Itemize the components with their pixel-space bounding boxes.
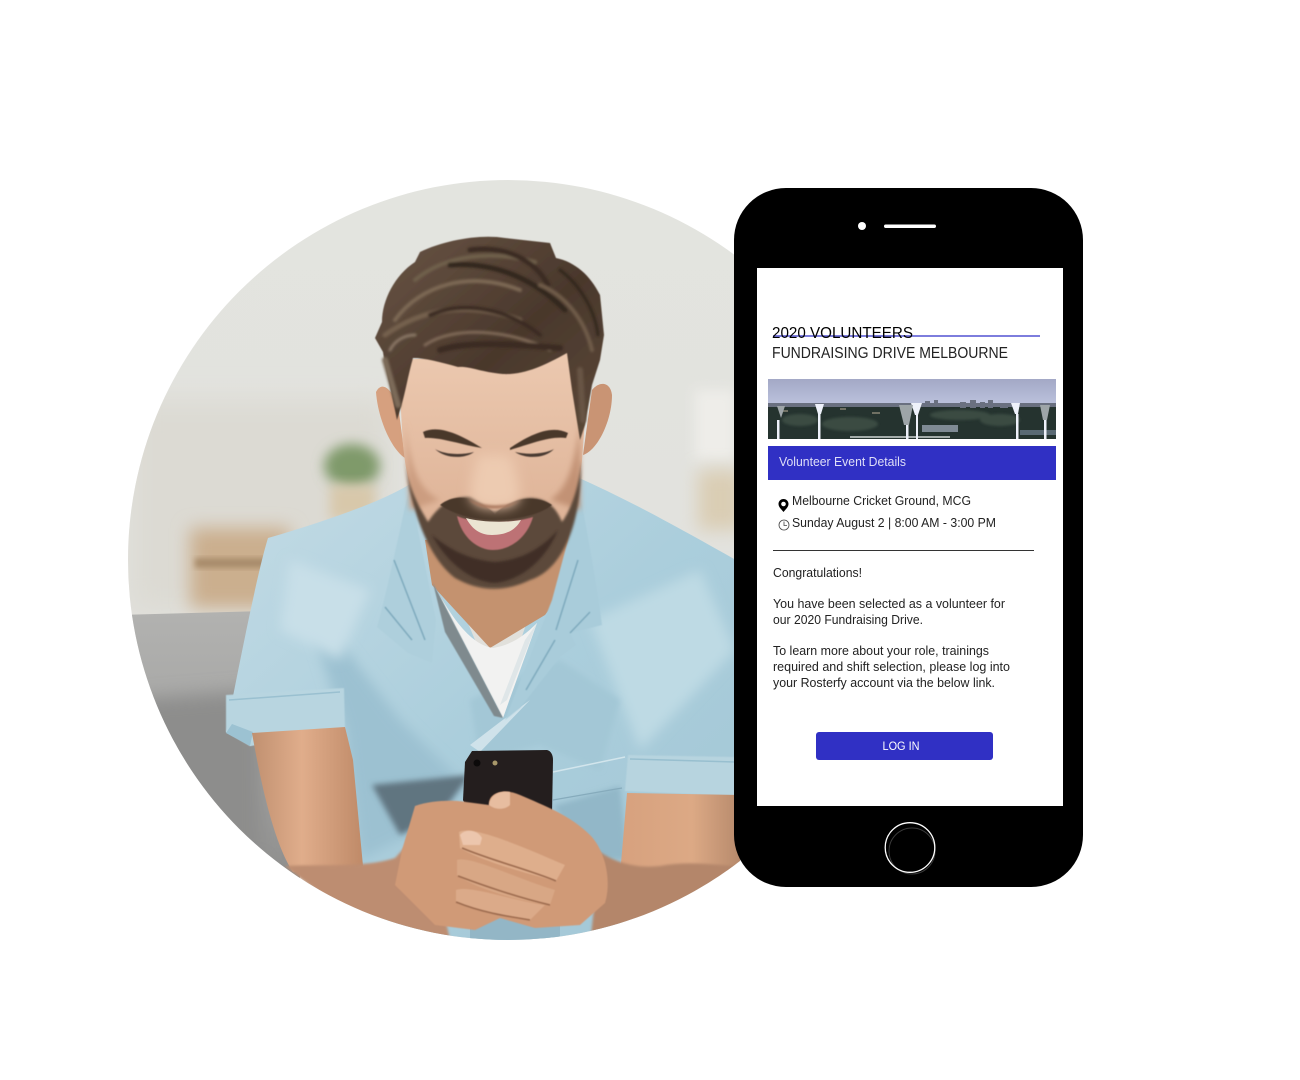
event location: Melbourne Cricket Ground, MCG (792, 494, 971, 508)
right arm (620, 793, 740, 875)
left sleeve cuff (226, 688, 345, 746)
email title (772, 325, 1040, 362)
email body text: To learn more about your role, trainings (773, 644, 989, 658)
phone mockup (734, 188, 1083, 887)
denim shirt body (226, 477, 745, 950)
hair mass (375, 237, 604, 440)
skyline (768, 400, 1056, 408)
lower placket (470, 700, 530, 752)
icon: clock (779, 520, 789, 530)
phone screen (757, 268, 1063, 806)
infographic canvas (128, 180, 1083, 940)
email title: 2020 VOLUNTEERS (772, 325, 913, 342)
email body text: our 2020 Fundraising Drive. (773, 613, 923, 627)
email body text: Congratulations! (773, 566, 862, 580)
tree line (782, 410, 1020, 431)
fabric shading (319, 650, 463, 854)
event date and time: Sunday August 2 | 8:00 AM - 3:00 PM (792, 516, 996, 530)
photo: man smiling at his phone in a circle (128, 180, 740, 940)
right sleeve cuff (625, 755, 735, 796)
email body text: You have been selected as a volunteer for (773, 597, 1005, 611)
section bar: volunteer event details: Volunteer Event Details (779, 455, 906, 469)
face (400, 353, 584, 522)
speaker (884, 224, 936, 228)
photo background: blurred living room (128, 180, 740, 938)
phone held in his hands (463, 750, 553, 810)
beard (403, 447, 581, 589)
stadium banner photo (768, 379, 1056, 439)
shirt collars (384, 500, 602, 720)
closed eyes (435, 449, 474, 457)
hands (395, 792, 608, 930)
ears (376, 387, 405, 458)
log in button: LOG IN (882, 741, 920, 753)
log in button (816, 732, 993, 760)
hair strands (385, 249, 598, 420)
email body text: required and shift selection, please log into (773, 660, 1010, 674)
mouth (457, 516, 533, 550)
neck and white t-shirt (425, 520, 570, 718)
left arm (252, 727, 363, 872)
teeth (466, 518, 521, 535)
face shading (404, 442, 438, 512)
icon: location pin (778, 499, 788, 512)
home button (885, 823, 935, 874)
camera dot (858, 222, 866, 230)
email body text: your Rosterfy account via the below link. (773, 676, 995, 690)
forearms (286, 848, 734, 936)
email title: FUNDRAISING DRIVE MELBOURNE (772, 345, 1008, 362)
head (375, 237, 612, 589)
email body text (773, 566, 1010, 690)
phone body (734, 188, 1083, 887)
eyebrows (423, 429, 482, 448)
section bar: volunteer event details (768, 446, 1056, 480)
nose (470, 455, 519, 508)
